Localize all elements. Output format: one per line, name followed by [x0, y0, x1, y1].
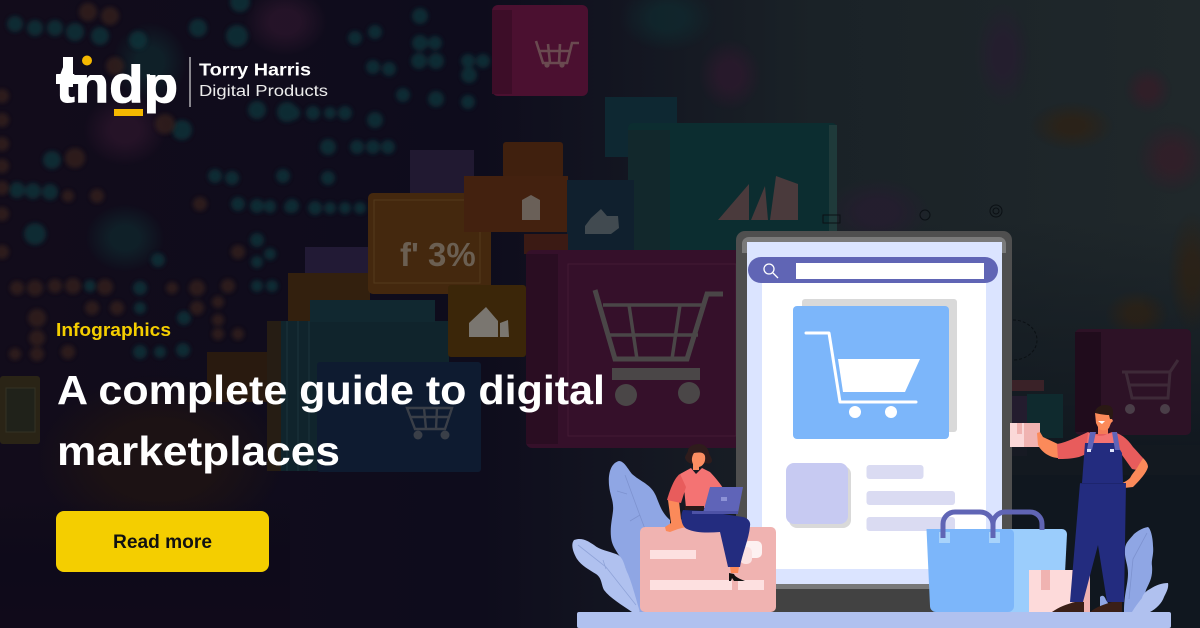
button: read more: Read more — [113, 531, 212, 553]
overalls — [1070, 443, 1126, 602]
button: read more — [56, 511, 269, 572]
product thumbnail — [786, 463, 851, 528]
box: teal layers — [267, 300, 449, 471]
tablet screen — [747, 242, 1002, 584]
box: purple rear — [410, 150, 474, 194]
box: large magenta with cart — [526, 250, 741, 448]
box: orange blurred — [207, 352, 269, 402]
bag handles — [943, 512, 1042, 539]
illustration: left leaves — [572, 461, 670, 612]
straps — [1087, 432, 1120, 450]
illustration: tablet storefront — [736, 231, 1012, 612]
hair — [685, 444, 712, 464]
box: red small — [524, 234, 568, 254]
parcel — [1029, 570, 1090, 612]
title: marketplaces — [57, 428, 340, 474]
heels — [729, 573, 745, 581]
shirt — [1057, 432, 1143, 470]
pants — [681, 510, 750, 567]
logo wordmark: Torry Harris — [199, 60, 311, 80]
background: stacked product boxes — [0, 5, 1200, 475]
box: navy with cart — [317, 362, 481, 472]
box: orange layers — [288, 273, 370, 323]
bokeh amber — [0, 3, 245, 361]
box: right stack — [1012, 380, 1063, 456]
logo wordmark — [199, 60, 328, 100]
arm — [665, 500, 686, 532]
box: purple low — [305, 247, 369, 283]
illustration: right leaves — [1100, 527, 1168, 612]
icon: shopping cart — [806, 333, 920, 418]
product text lines — [866, 465, 955, 531]
tablet frame — [736, 231, 1012, 612]
box: teal large with factory — [628, 123, 837, 253]
face — [692, 452, 705, 470]
logo wordmark: Digital Products — [199, 83, 328, 100]
bokeh teal — [7, 0, 490, 359]
held parcel — [1010, 423, 1040, 447]
category label: Infographics — [56, 319, 171, 340]
box: orange warehouse — [448, 285, 526, 357]
title: A complete guide to digital — [57, 367, 605, 413]
illustration: woman with laptop — [665, 444, 750, 581]
box: magenta top with cart — [492, 5, 588, 96]
shirt — [680, 468, 723, 508]
box: orange percent: f' 3% — [400, 236, 476, 273]
product image card — [793, 299, 957, 439]
laptop — [703, 487, 743, 513]
head — [1095, 413, 1113, 430]
box: orange percent — [368, 193, 491, 294]
logo mark: thdp — [56, 56, 178, 114]
bag: back — [980, 529, 1067, 612]
floor reflection right — [1012, 445, 1200, 475]
illustration: man in overalls — [1010, 405, 1148, 612]
title — [57, 367, 605, 474]
left arm — [1037, 432, 1060, 458]
small icons on background — [823, 205, 1037, 360]
illustration: platform — [577, 612, 1171, 628]
box: teal rear — [605, 97, 677, 157]
logo — [56, 56, 328, 116]
bag: front — [926, 529, 1014, 612]
illustration: shopping bags — [926, 512, 1090, 612]
illustration: credit card — [640, 527, 776, 612]
box: left small switch — [0, 376, 40, 444]
shoes — [1052, 602, 1122, 612]
right arm — [1112, 458, 1148, 489]
neck — [1098, 426, 1108, 436]
box: dim magenta right — [1075, 329, 1191, 435]
box: orange house — [464, 142, 568, 232]
logo divider — [190, 57, 191, 107]
box: navy with truck — [567, 180, 634, 252]
belt — [685, 506, 704, 510]
icon: magnifier — [764, 264, 778, 278]
search bar — [748, 257, 998, 283]
